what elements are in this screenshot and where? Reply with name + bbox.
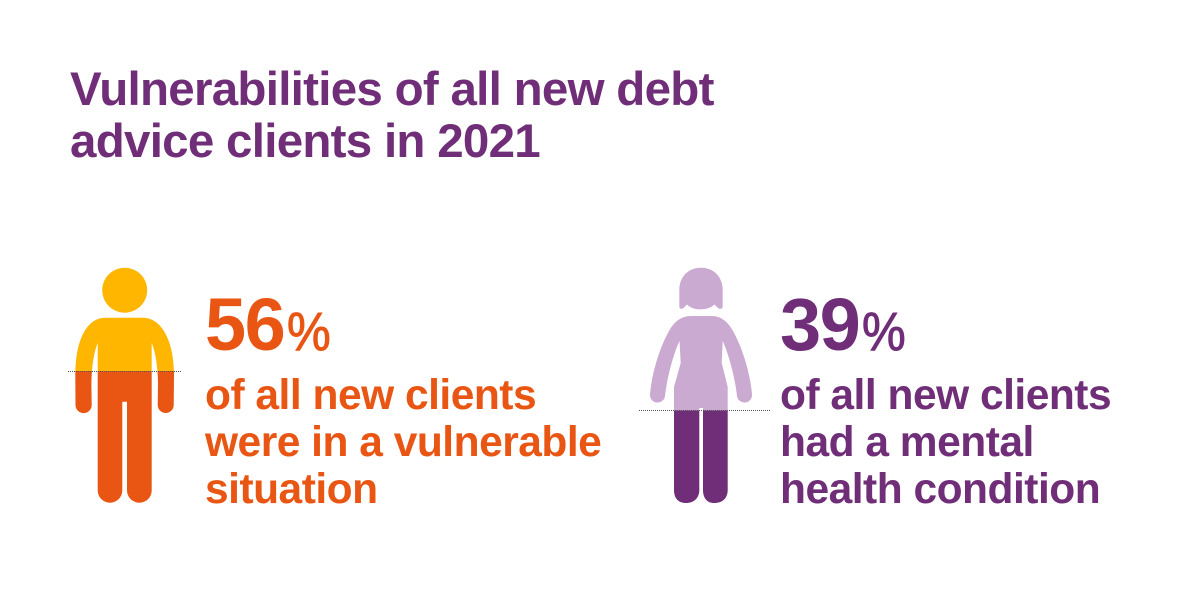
icon: woman 39% filled	[639, 268, 770, 503]
text: mental health condition: had a mental	[780, 419, 1034, 466]
text: mental health condition: of all new clients	[780, 372, 1111, 419]
icon: man 56% filled	[68, 268, 181, 503]
stat: 39%	[780, 283, 906, 366]
text: vulnerable situation	[204, 372, 601, 513]
stat: 56%	[205, 283, 331, 366]
text: mental health condition: health condition	[780, 466, 1100, 513]
text: vulnerable situation: were in a vulnerable	[205, 419, 601, 466]
stat: 56%: %	[287, 302, 331, 362]
text: vulnerable situation: of all new clients	[205, 372, 536, 419]
figures	[68, 268, 770, 503]
stat: 39%: 39	[780, 283, 859, 366]
text: mental health condition	[780, 372, 1111, 513]
text: vulnerable situation: situation	[205, 466, 378, 513]
stat: 56%: 56	[205, 283, 284, 366]
stat: 39%: %	[862, 302, 906, 362]
title	[70, 63, 714, 168]
title: Vulnerabilities of all new debt	[70, 63, 714, 116]
title: advice clients in 2021	[70, 115, 540, 168]
